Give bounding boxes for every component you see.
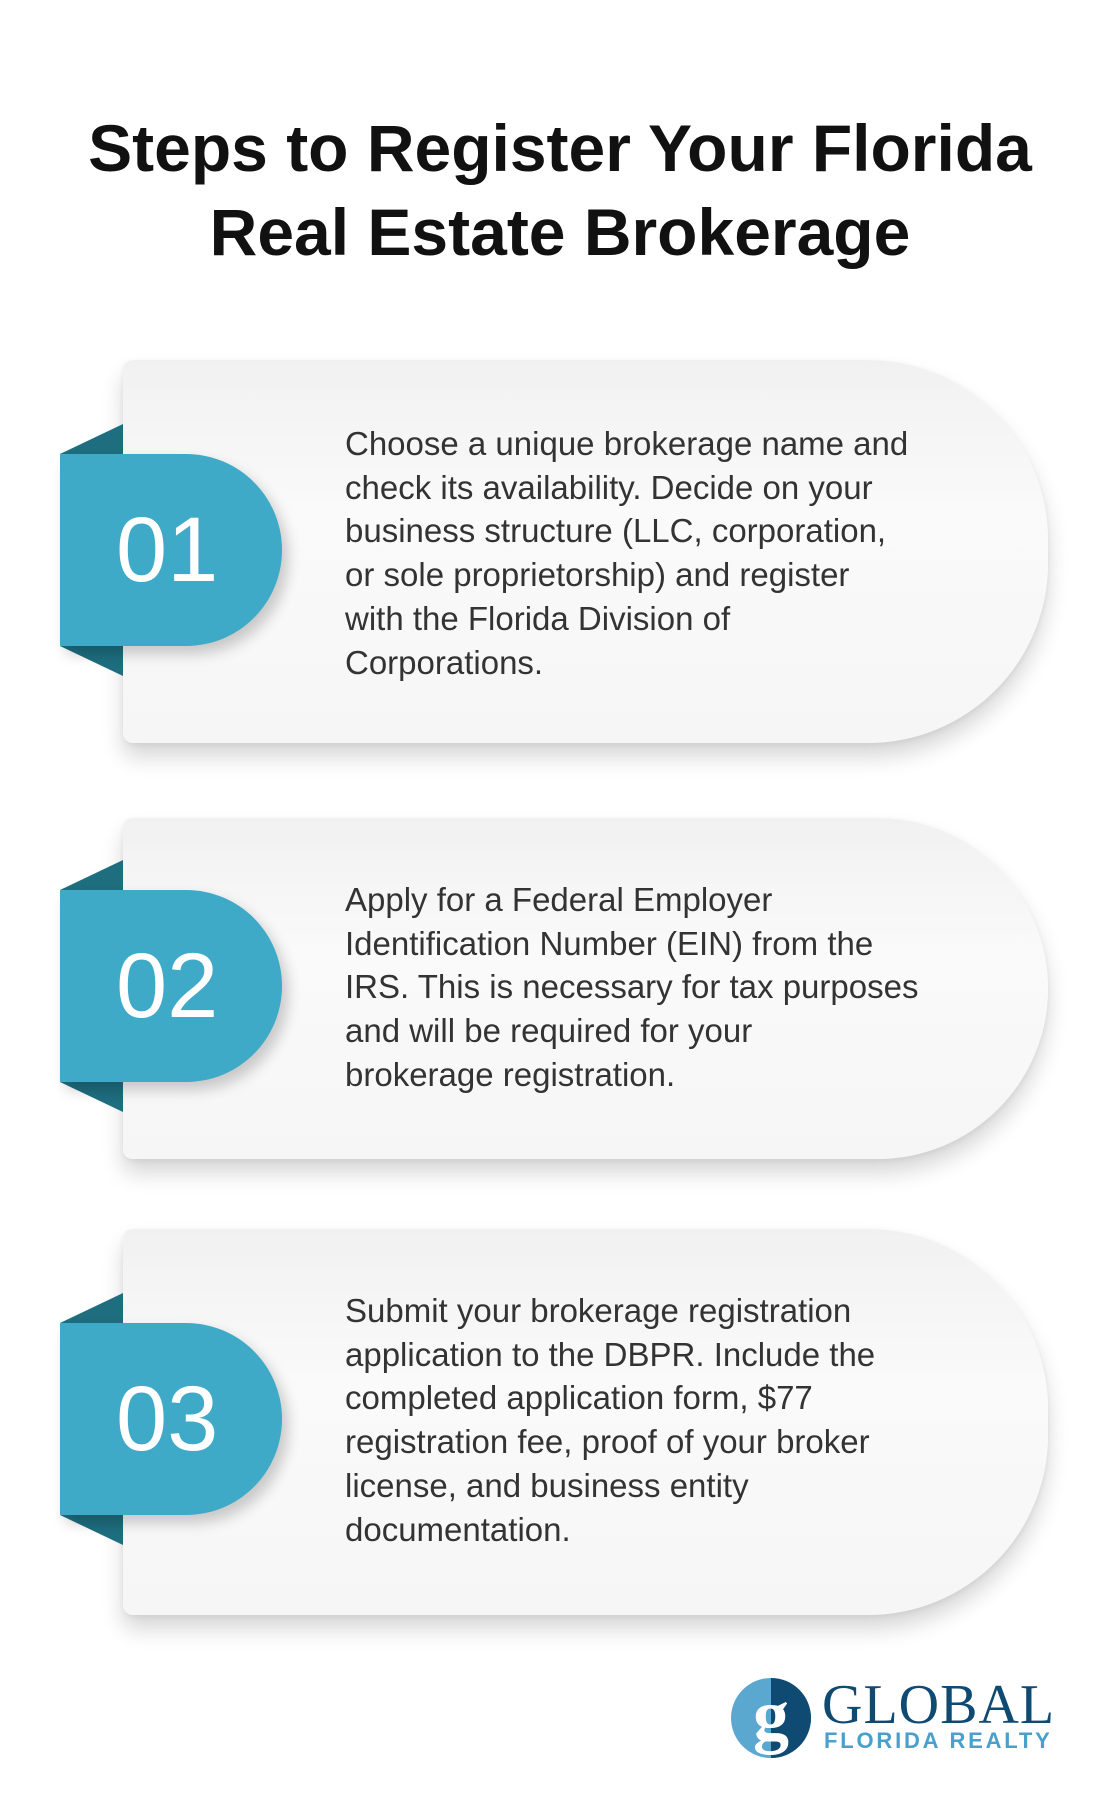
- badge 01: 01: [116, 499, 218, 601]
- icon: g circle: g: [753, 1677, 789, 1755]
- text step 3: [345, 1292, 875, 1548]
- text step 1: [345, 425, 908, 681]
- text step 1: business structure (LLC, corporation,: [345, 512, 886, 549]
- fold top 3: [60, 1293, 123, 1323]
- card 2 background: [123, 818, 1048, 1159]
- logo: [731, 1674, 1055, 1758]
- fold bottom 3: [60, 1515, 123, 1545]
- text step 3: Submit your brokerage registration: [345, 1292, 851, 1329]
- text step 1: or sole proprietorship) and register: [345, 556, 849, 593]
- text step 2: [345, 881, 918, 1093]
- card 3 background: [123, 1229, 1048, 1615]
- panel: step 3: [60, 1229, 1056, 1638]
- badge 03: [60, 1323, 282, 1515]
- icon: g circle: [731, 1677, 811, 1758]
- text step 3: documentation.: [345, 1511, 571, 1548]
- text step 1: Corporations.: [345, 644, 543, 681]
- text step 3: registration fee, proof of your broker: [345, 1423, 870, 1460]
- fold top 2: [60, 860, 123, 890]
- fold bottom 2: [60, 1082, 123, 1112]
- text step 1: Choose a unique brokerage name and: [345, 425, 908, 462]
- badge 01: [60, 454, 282, 646]
- logo subtitle: FLORIDA REALTY: [824, 1728, 1053, 1753]
- badge 02: [60, 890, 282, 1082]
- fold bottom 1: [60, 646, 123, 676]
- title: Real Estate Brokerage: [210, 195, 910, 269]
- title: Steps to Register Your Florida: [88, 111, 1032, 185]
- text step 1: with the Florida Division of: [345, 600, 730, 637]
- logo wordmark: GLOBAL: [822, 1674, 1055, 1736]
- text step 3: completed application form, $77: [345, 1379, 813, 1416]
- text step 1: check its availability. Decide on your: [345, 469, 873, 506]
- text step 2: brokerage registration.: [345, 1056, 675, 1093]
- title: [88, 111, 1032, 269]
- card 1 background: [123, 360, 1048, 743]
- text step 2: Identification Number (EIN) from the: [345, 925, 873, 962]
- badge 03: 03: [116, 1368, 218, 1470]
- badge 02: 02: [116, 935, 218, 1037]
- text step 2: Apply for a Federal Employer: [345, 881, 772, 918]
- panel: step 2: [60, 818, 1056, 1182]
- fold top 1: [60, 424, 123, 454]
- text step 2: and will be required for your: [345, 1012, 752, 1049]
- text step 3: application to the DBPR. Include the: [345, 1336, 875, 1373]
- text step 2: IRS. This is necessary for tax purposes: [345, 968, 918, 1005]
- text step 3: license, and business entity: [345, 1467, 749, 1504]
- panel: step 1: [60, 360, 1056, 766]
